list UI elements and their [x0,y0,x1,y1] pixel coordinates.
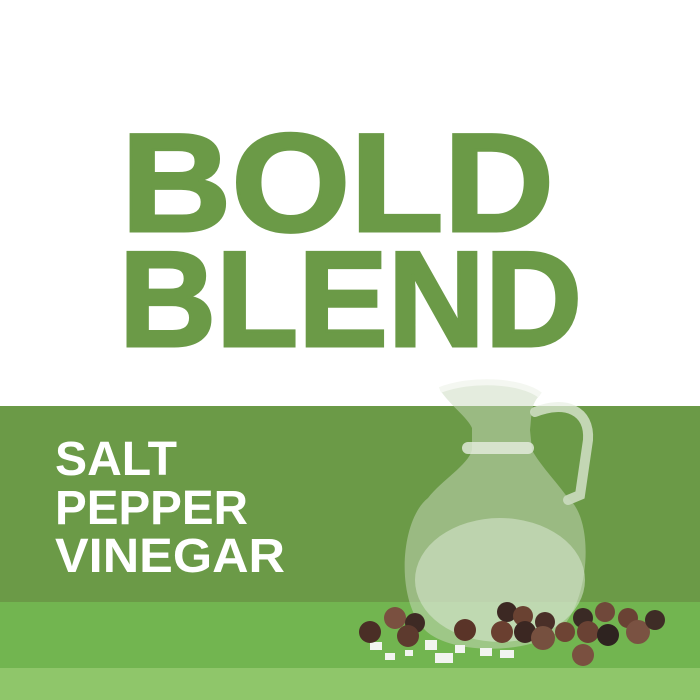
icon: jug [405,382,586,649]
subtitle list: PEPPER [55,482,248,535]
band: mid green [0,602,700,669]
icon: jug handle [535,407,588,500]
band: dark green [0,406,700,603]
icon: salt crystals [370,640,514,663]
title: BOLD [121,104,554,261]
subtitle list: SALT [55,433,177,486]
subtitle list: VINEGAR [55,530,285,583]
title [119,104,582,375]
icon: peppercorns [359,602,665,666]
illustration: vinegar jug with peppercorns [359,380,665,666]
subtitle list [55,433,285,583]
title: BLEND [119,223,582,375]
band: light green [0,668,700,700]
